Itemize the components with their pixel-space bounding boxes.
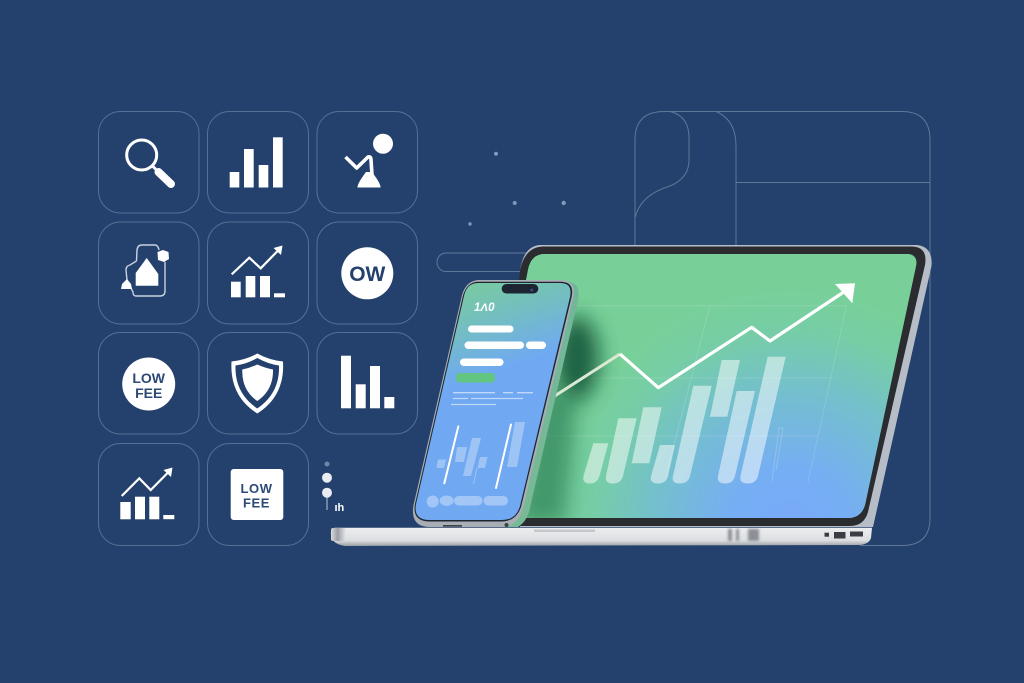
thin text lines [451,393,533,404]
laptop lid edge [520,245,932,527]
tile: growth chart with arrow [208,222,308,324]
tile: growth chart lower [98,444,199,546]
tile: connected house [98,222,199,324]
phone chart white strokes [444,424,511,488]
phone bottom details [443,523,508,527]
laptop screen [526,254,916,518]
tile: low fee square: FEE [243,496,270,510]
base left highlight [331,528,346,541]
phone silver frame [413,280,574,527]
phone bottom nav [427,496,508,508]
decorative sparkle dots [468,152,566,226]
translucent bars [583,357,786,484]
tile: OW badge [317,222,418,324]
phone glass side [480,282,579,527]
tile: descending bars [317,332,418,434]
phone dark outline [415,282,572,522]
side ports [824,532,863,538]
tile: shield [208,332,308,434]
white content pills [460,326,546,366]
tile: low fee circle [98,332,199,434]
small dots and mini label: ıh [334,502,345,514]
tile: OW badge: OW [349,263,386,286]
small dots and mini label [322,462,345,514]
hinge marks [728,529,759,541]
tile: low fee square [208,444,308,546]
phone screen [416,283,571,520]
phone shadow on screen [515,316,599,525]
line-art backdrop frame [635,112,930,546]
base center notch [534,530,595,532]
icon grid [98,112,418,546]
tile: abstract figure with flask [317,112,418,213]
laptop bezel [500,246,925,526]
outline pill behind laptop [437,253,547,272]
phone candle chart [436,422,525,484]
notch [502,284,538,294]
tile: bar chart [208,112,308,213]
line chart trend with arrow [550,283,855,399]
laptop base [331,528,872,546]
tile: magnifying glass [98,112,199,213]
screen grid lines [545,305,847,482]
status text: 1Λ0 [474,302,495,314]
green button [456,373,495,382]
laptop [331,245,932,546]
tile: low fee circle: LOW [132,370,166,386]
tile: low fee square: LOW [240,481,273,496]
smartphone [405,280,580,527]
tile: low fee circle: FEE [135,385,162,401]
